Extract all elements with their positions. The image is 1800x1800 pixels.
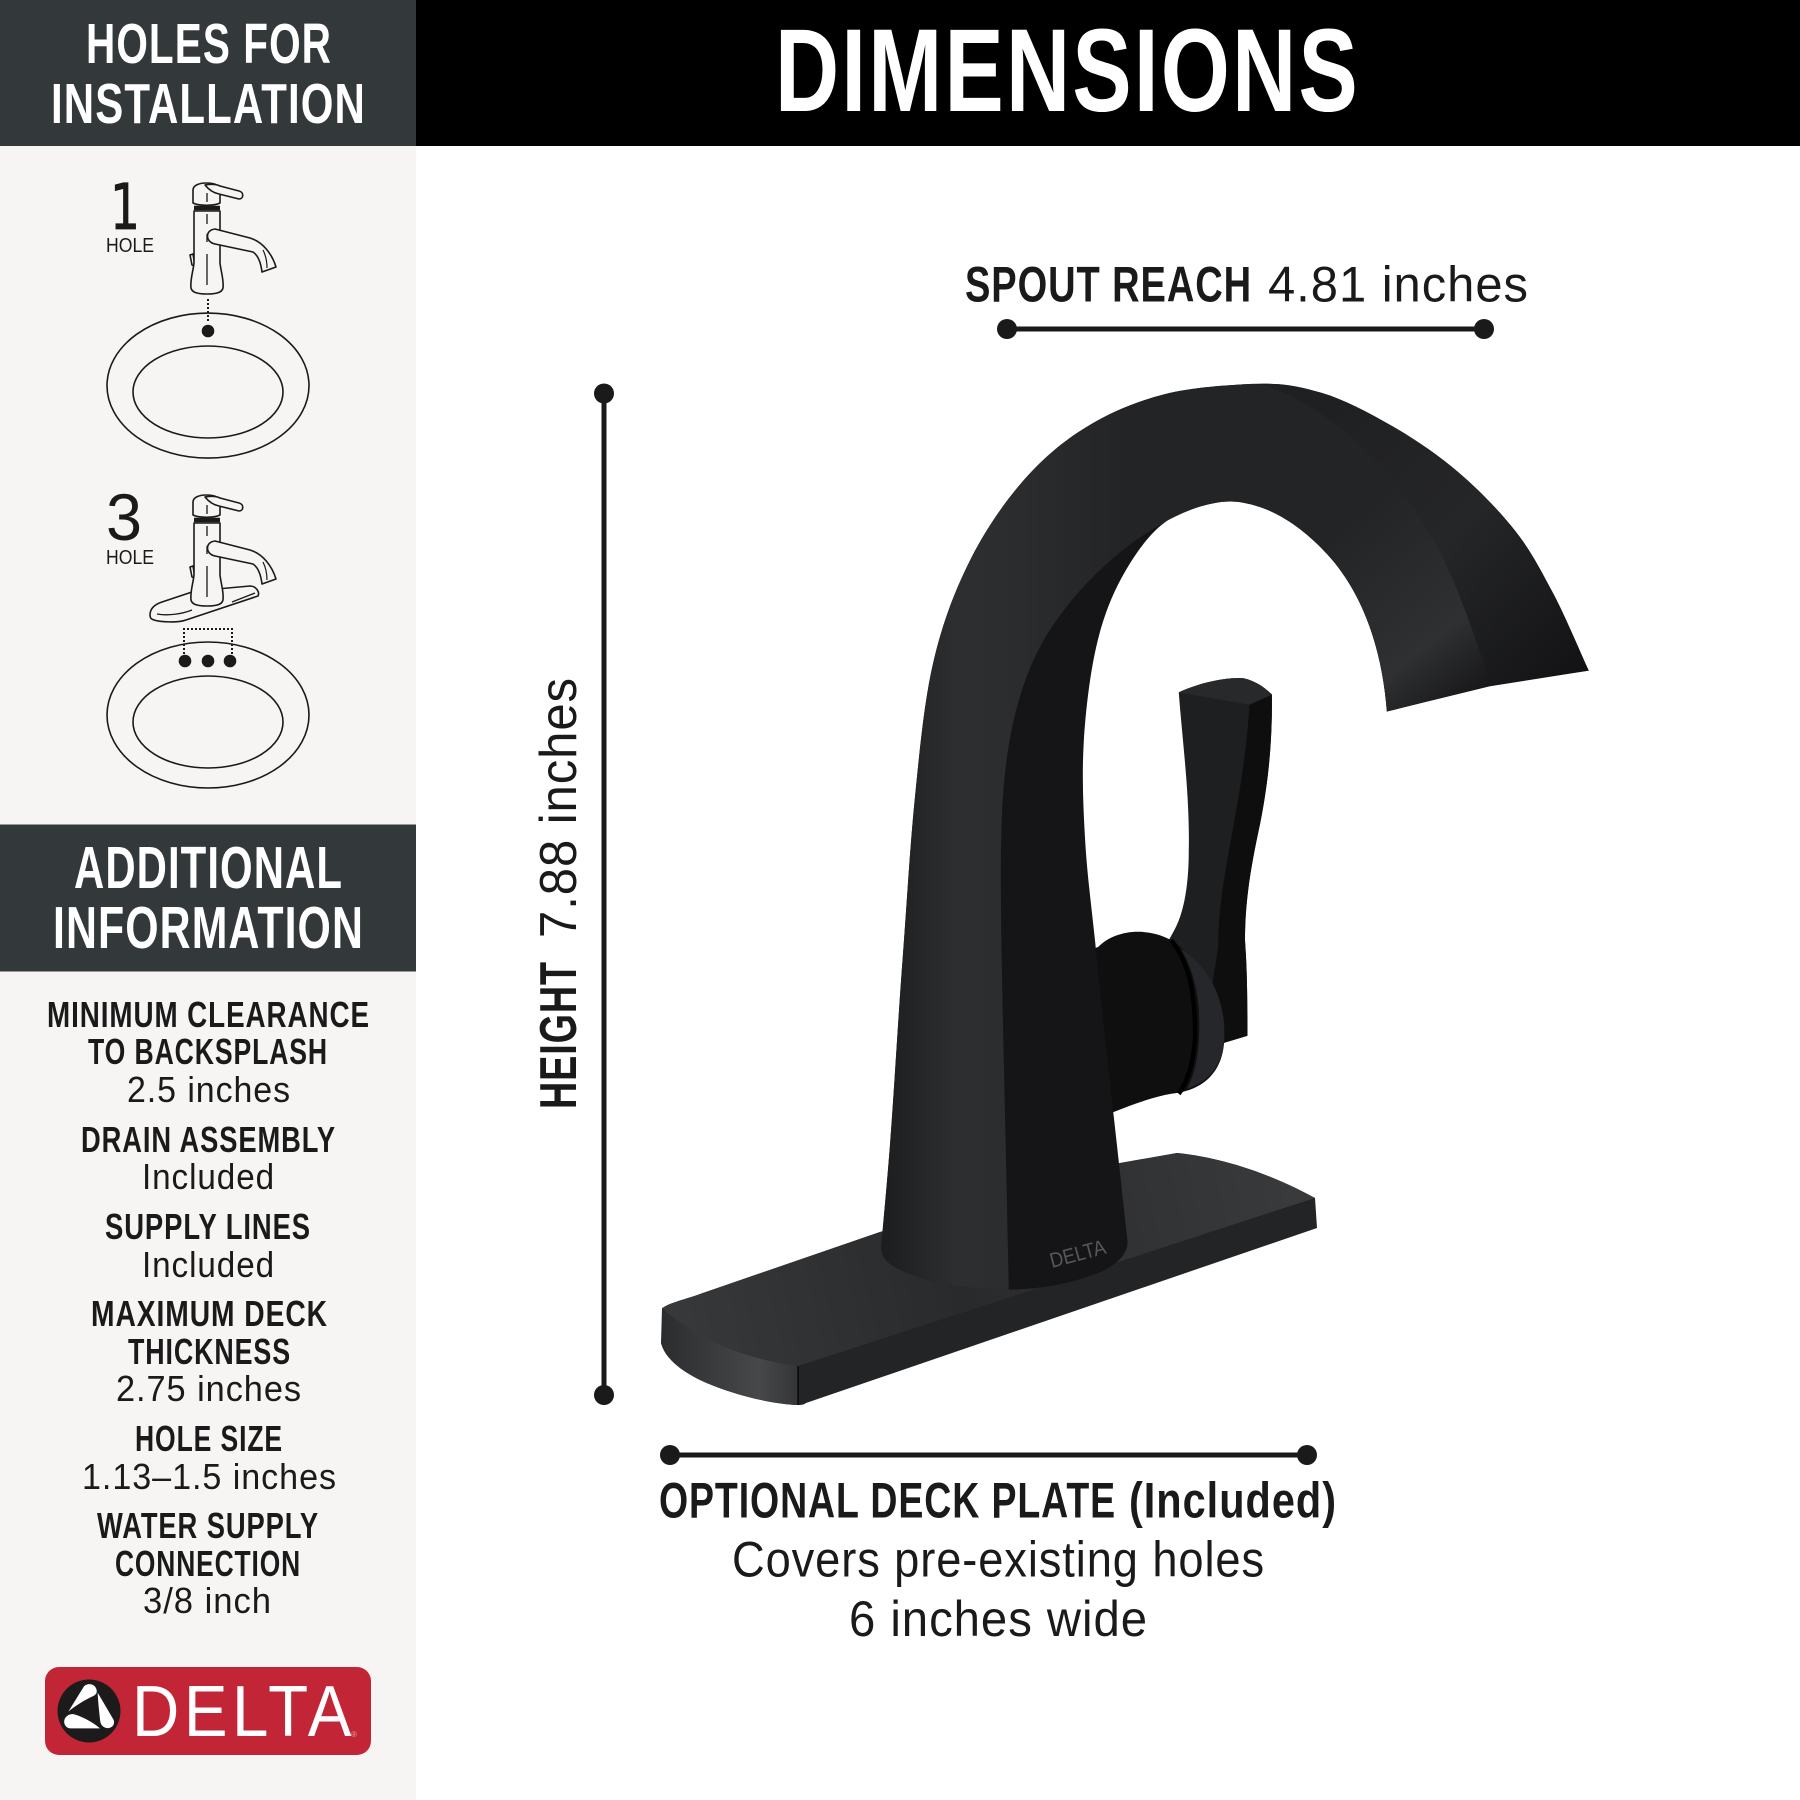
text block: minimum clearance: TO BACKSPLASH xyxy=(88,1031,328,1072)
logo: Delta xyxy=(45,1667,371,1755)
faucet logo text: DELTA xyxy=(1047,1236,1108,1273)
text block: drain assembly: DRAIN ASSEMBLY xyxy=(81,1119,336,1160)
logo wordmark: DELTA xyxy=(132,1672,356,1752)
label: height 7.88 inches: 7.88 inches xyxy=(530,677,588,938)
text: 6 inches wide: 6 inches wide xyxy=(849,1591,1148,1647)
label: optional deck plate included: (Included) xyxy=(1129,1473,1337,1529)
dimension: spout reach xyxy=(965,257,1529,339)
label: spout reach 4.81 inches: SPOUT REACH xyxy=(965,257,1252,313)
icon: sink with one hole xyxy=(107,299,309,458)
text block: water supply connection: WATER SUPPLY xyxy=(97,1505,319,1546)
text block: drain assembly xyxy=(81,1119,336,1197)
panel: left sidebar background xyxy=(0,0,416,1800)
dimension line: height xyxy=(594,384,614,1405)
dimension line: spout reach xyxy=(997,319,1494,339)
lever handle xyxy=(1165,678,1272,1049)
text block: minimum clearance: 2.5 inches xyxy=(127,1069,291,1110)
dimension: optional deck plate xyxy=(659,1445,1337,1647)
text block: maximum deck thickness: 2.75 inches xyxy=(116,1368,302,1409)
header: holes for installation xyxy=(0,0,416,146)
text block: maximum deck thickness: THICKNESS xyxy=(128,1331,291,1372)
product photo: black faucet xyxy=(881,384,1589,1290)
text block: maximum deck thickness: MAXIMUM DECK xyxy=(91,1293,328,1334)
text block: minimum clearance xyxy=(47,994,370,1110)
icon group: 1 hole installation xyxy=(106,171,309,458)
header: additional information xyxy=(0,824,416,972)
label: spout reach 4.81 inches: 4.81 inches xyxy=(1268,257,1529,313)
header: dimensions banner xyxy=(416,0,1800,146)
heading line: information: INFORMATION xyxy=(53,895,364,961)
title: DIMENSIONS: DIMENSIONS xyxy=(775,5,1360,137)
text block: supply lines xyxy=(105,1206,311,1285)
text block: supply lines: Included xyxy=(142,1244,275,1285)
label: spout reach 4.81 inches xyxy=(965,257,1529,313)
text block: hole size: HOLE SIZE xyxy=(135,1418,283,1459)
heading line: installation: INSTALLATION xyxy=(51,72,366,136)
text block: hole size xyxy=(82,1418,337,1497)
label: optional deck plate included: OPTIONAL DECK PLATE xyxy=(659,1473,1116,1529)
label: 1 hole: 1 xyxy=(110,171,140,244)
icon: single handle faucet xyxy=(190,183,276,294)
icon: deck plate under faucet xyxy=(150,586,259,622)
text block: water supply connection xyxy=(97,1505,319,1621)
dimension line: deck plate xyxy=(660,1445,1317,1465)
label: 3 hole: 3 xyxy=(106,480,142,554)
text block: supply lines: SUPPLY LINES xyxy=(105,1206,311,1247)
handle hub xyxy=(1078,932,1224,1112)
text block: water supply connection: CONNECTION xyxy=(115,1543,301,1584)
icon: faucet on deck plate xyxy=(190,495,276,606)
text block: drain assembly: Included xyxy=(142,1156,275,1197)
dimension: height xyxy=(530,384,614,1405)
product photo: deck plate xyxy=(661,1153,1317,1405)
text block: maximum deck thickness xyxy=(91,1293,328,1409)
label: height 7.88 inches xyxy=(530,677,588,1109)
text: covers pre-existing holes: Covers pre-existing holes xyxy=(732,1532,1265,1588)
text block: hole size: 1.13–1.5 inches xyxy=(82,1456,337,1497)
icon: sink with three holes xyxy=(107,629,309,788)
registered mark: ® xyxy=(351,1730,357,1739)
heading line: additional: ADDITIONAL xyxy=(74,835,343,901)
label: 3 hole xyxy=(106,480,154,569)
heading line: holes for: HOLES FOR xyxy=(86,12,332,76)
label: 3 hole: HOLE xyxy=(106,546,154,569)
logo mark: circle with three teardrops xyxy=(58,1680,120,1742)
faucet body and spout xyxy=(881,384,1589,1290)
text block: water supply connection: 3/8 inch xyxy=(143,1580,272,1621)
label: height 7.88 inches: HEIGHT xyxy=(530,961,588,1109)
icon group: 3 hole installation xyxy=(106,480,309,788)
label: 1 hole: HOLE xyxy=(106,234,154,257)
text block: minimum clearance: MINIMUM CLEARANCE xyxy=(47,994,370,1035)
